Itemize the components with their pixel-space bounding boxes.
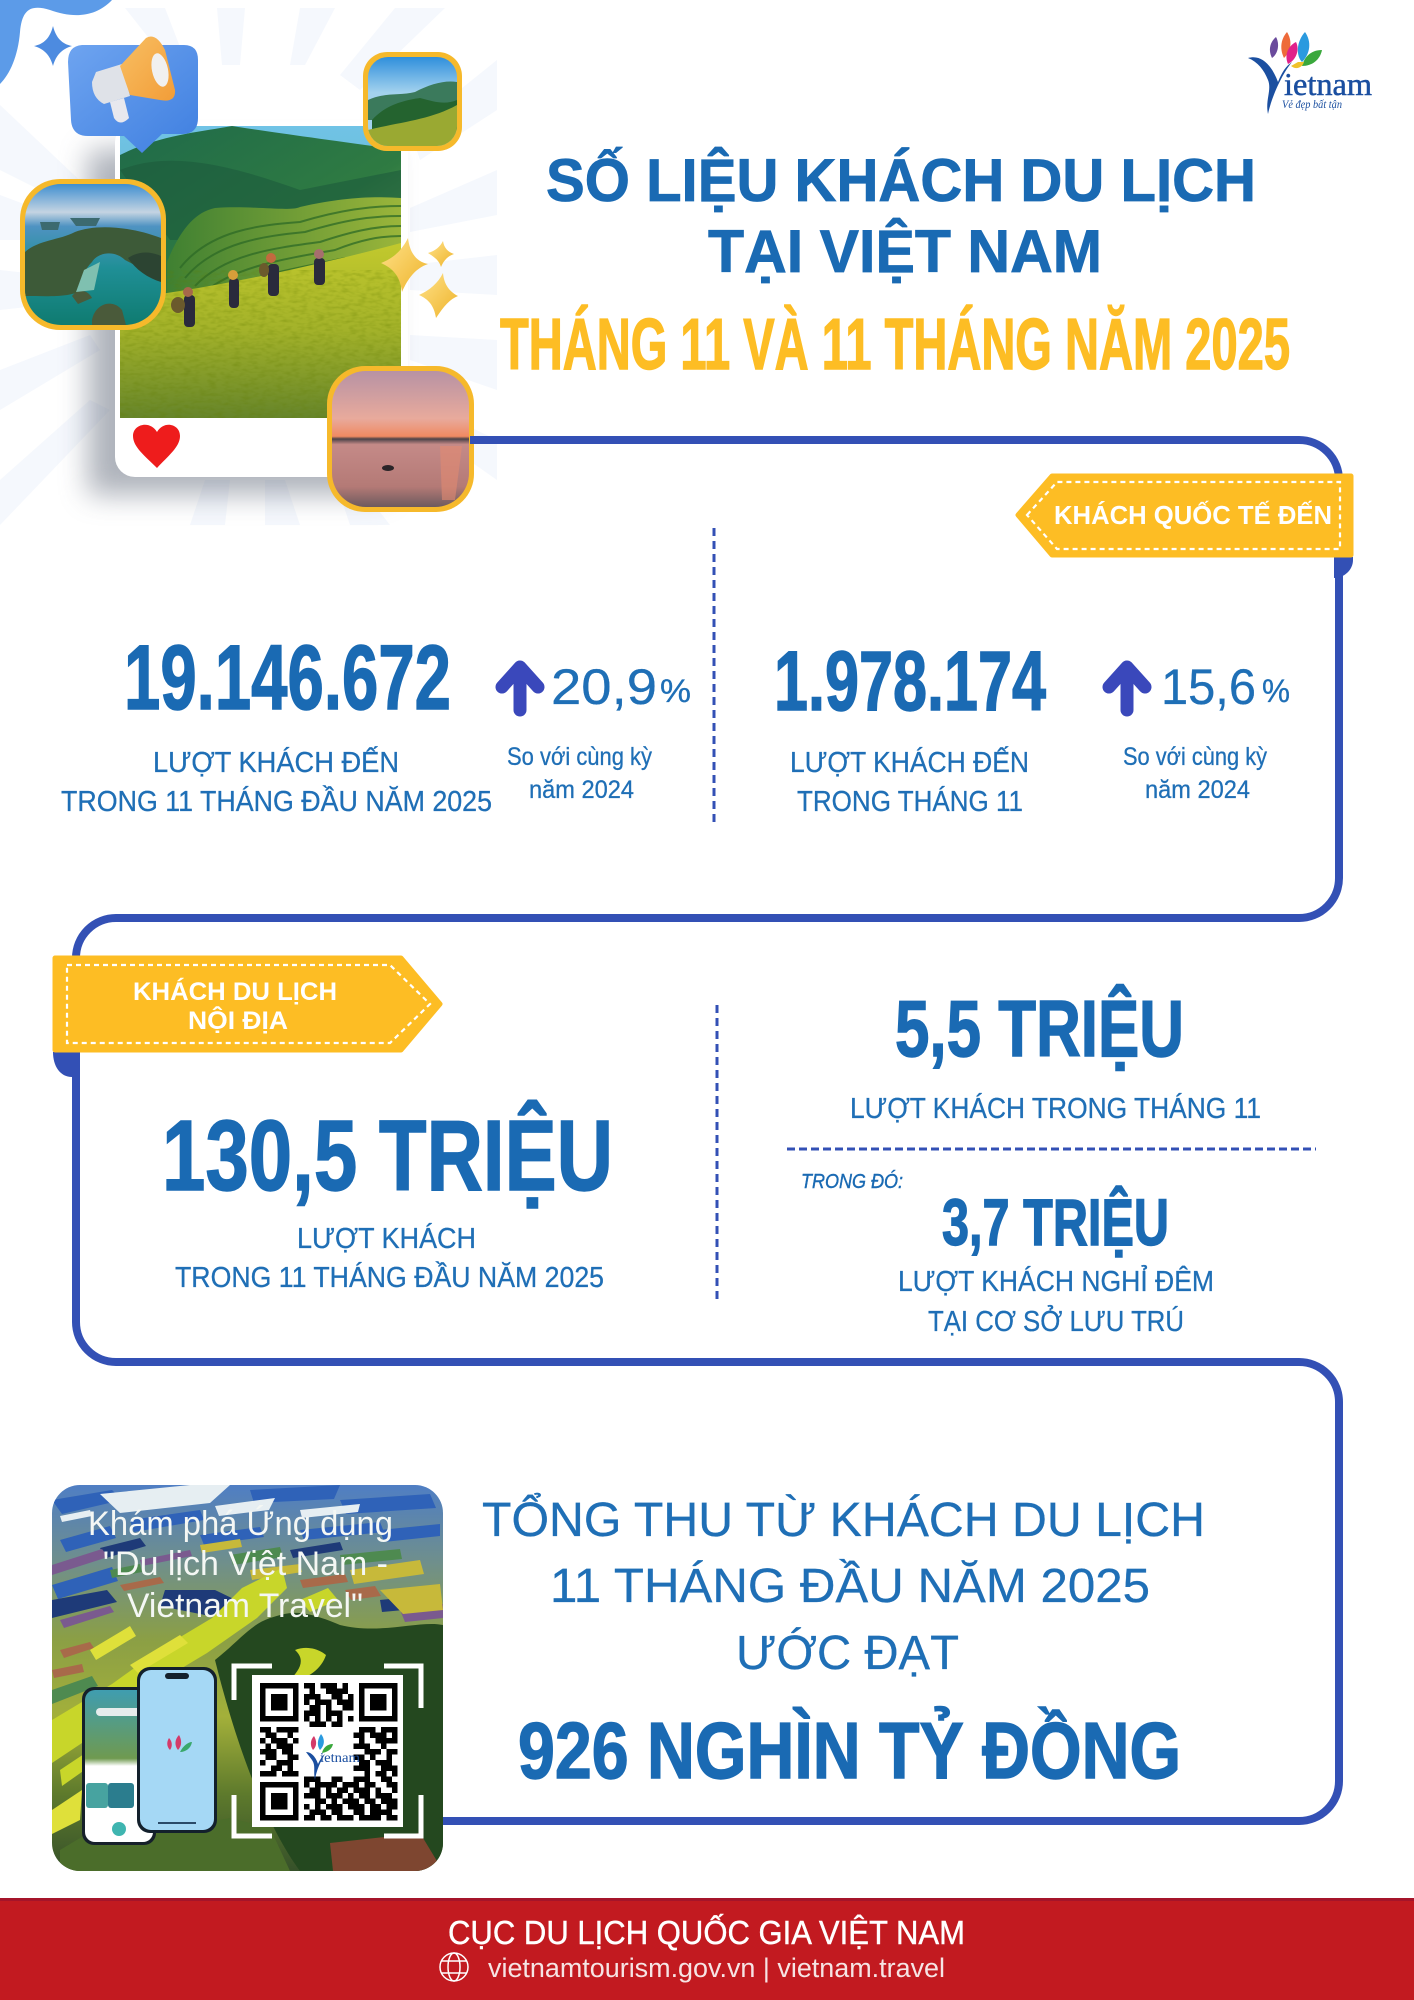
- stat: 11 months domestic: [162, 1100, 613, 1294]
- icon: up arrow: [502, 667, 538, 710]
- icon: up arrow: [1109, 667, 1145, 710]
- stat: overnight guests: 3,7 TRIỆU: [942, 1185, 1169, 1259]
- panel: total revenue: TỔNG THU TỪ KHÁCH DU LỊCH: [482, 1492, 1205, 1547]
- panel: total revenue: [482, 1492, 1205, 1795]
- stat: overnight guests: TRONG ĐÓ:: [801, 1170, 903, 1193]
- panel: total revenue: 926 NGHÌN TỶ ĐỒNG: [518, 1706, 1181, 1795]
- banner: international: KHÁCH QUỐC TẾ ĐẾN: [1054, 500, 1332, 530]
- photo card: [88, 122, 408, 495]
- title: SỐ LIỆU KHÁCH DU LỊCH: [546, 147, 1256, 214]
- stat: overnight guests: LƯỢT KHÁCH NGHỈ ĐÊM: [898, 1264, 1214, 1298]
- QR centre logo: ietnam: [320, 1751, 360, 1766]
- stat: overnight guests: TẠI CƠ SỞ LƯU TRÚ: [928, 1304, 1184, 1338]
- stat: 11 months domestic: LƯỢT KHÁCH: [297, 1222, 476, 1255]
- change: +20.9%: năm 2024: [529, 776, 634, 804]
- QR code: [234, 1666, 421, 1836]
- logo: Vietnam tourism: ietnam: [1284, 66, 1372, 102]
- panel: international visitors: [61, 476, 1353, 826]
- stat: November international: TRONG THÁNG 11: [797, 785, 1023, 818]
- change: +20.9%: %: [660, 673, 691, 709]
- icon: megaphone speech bubble: [68, 36, 198, 153]
- footer: CỤC DU LỊCH QUỐC GIA VIỆT NAM: [448, 1913, 965, 1951]
- stat: 11 months international: [61, 627, 492, 818]
- banner: domestic: [53, 958, 440, 1077]
- stat: 11 months domestic: 130,5 TRIỆU: [162, 1100, 613, 1212]
- farmers: [171, 249, 325, 327]
- change: +20.9%: So với cùng kỳ: [507, 743, 652, 771]
- icon: golden sparkles: [381, 238, 458, 318]
- footer: vietnamtourism.gov.vn | vietnam.travel: [488, 1953, 945, 1983]
- promo text: [88, 1505, 393, 1625]
- stat: overnight guests: [801, 1170, 1214, 1338]
- stat: 11 months international: TRONG 11 THÁNG ĐẦU NĂM 2025: [61, 784, 492, 818]
- banner: international: [1018, 476, 1353, 578]
- change: +15.6%: [1109, 659, 1290, 804]
- change: +20.9%: 20,9: [551, 659, 657, 715]
- stat: 11 months international: LƯỢT KHÁCH ĐẾN: [153, 745, 399, 779]
- continuous panel outline: [76, 440, 1339, 1821]
- panel: total revenue: ƯỚC ĐẠT: [736, 1626, 959, 1680]
- stat: November domestic: 5,5 TRIỆU: [895, 984, 1184, 1073]
- decorative swoosh top left: [0, 0, 112, 84]
- change: +15.6%: %: [1262, 673, 1290, 709]
- aerial photo background: [52, 1485, 443, 1871]
- decorative sunburst rays: [0, 8, 497, 525]
- photo: mountain landscape: [363, 52, 462, 151]
- panel: domestic visitors: [53, 958, 1316, 1338]
- phone mockup: splash screen: [137, 1667, 217, 1833]
- footer: [0, 1898, 1414, 2000]
- banner: domestic: KHÁCH DU LỊCH: [133, 977, 337, 1006]
- photo: Ha Long bay: [20, 179, 166, 330]
- promo text: Vietnam Travel": [127, 1587, 363, 1625]
- main photo: rice terraces: [120, 126, 401, 418]
- stat: November international: [774, 634, 1046, 818]
- promo text: "Du lịch Việt Nam -: [103, 1545, 388, 1583]
- change: +15.6%: năm 2024: [1145, 776, 1250, 804]
- logo: Vietnam tourism: Vẻ đẹp bất tận: [1282, 97, 1342, 111]
- stat: November international: 1.978.174: [774, 634, 1046, 728]
- photo: sunset river: [327, 366, 474, 512]
- stat: 11 months international: 19.146.672: [124, 627, 451, 729]
- panel: total revenue: 11 THÁNG ĐẦU NĂM 2025: [550, 1559, 1150, 1613]
- stat: 11 months domestic: TRONG 11 THÁNG ĐẦU NĂM 2025: [175, 1260, 604, 1294]
- icon: globe: [440, 1953, 468, 1981]
- change: +15.6%: 15,6: [1161, 659, 1256, 715]
- icon: blue sparkle: [34, 26, 72, 66]
- promo text: Khám phá Ứng dụng: [88, 1505, 393, 1543]
- title: [500, 147, 1290, 385]
- stat: November domestic: LƯỢT KHÁCH TRONG THÁNG 11: [850, 1092, 1261, 1125]
- banner: domestic: NỘI ĐỊA: [188, 1005, 288, 1035]
- QR centre logo: [306, 1734, 360, 1780]
- title: TẠI VIỆT NAM: [708, 218, 1102, 285]
- stat: November domestic: [850, 984, 1261, 1125]
- stat: November international: LƯỢT KHÁCH ĐẾN: [790, 745, 1029, 779]
- icon: heart: [133, 425, 180, 468]
- logo: Vietnam tourism: [1248, 32, 1372, 114]
- panel: travel app promo: [52, 1485, 443, 1871]
- change: +15.6%: So với cùng kỳ: [1123, 743, 1267, 771]
- change: +20.9%: [502, 659, 691, 804]
- phone mockup: home screen: [82, 1687, 156, 1845]
